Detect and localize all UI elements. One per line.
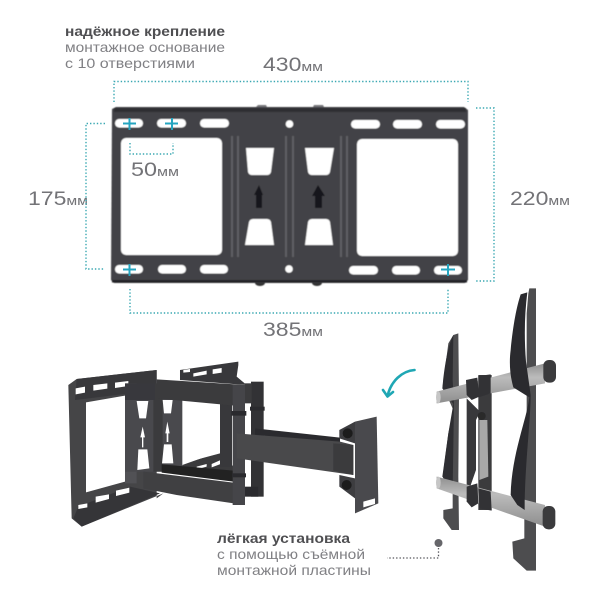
heading: reliable mounting: с 10 отверстиями xyxy=(65,55,195,71)
frame slots xyxy=(76,381,129,509)
left rail back xyxy=(443,333,459,530)
rear vertical post xyxy=(220,403,232,467)
swing arm mount perspective view xyxy=(68,362,378,527)
frame rail shading xyxy=(75,370,157,400)
mounting plate front view xyxy=(111,105,468,286)
dimension: height 220 mm xyxy=(476,108,570,281)
dimension: hole spacing 50 mm: 50 мм xyxy=(131,160,179,181)
ribs xyxy=(231,136,348,257)
upper and lower slots xyxy=(115,119,465,274)
cyan rotation arrow xyxy=(383,370,414,396)
large windows xyxy=(121,138,222,255)
front tube xyxy=(233,385,245,505)
dimension: height 175 mm xyxy=(28,124,105,269)
outer arm xyxy=(255,428,340,443)
center clamps xyxy=(466,374,492,511)
heading: reliable mounting: надёжное крепление xyxy=(65,23,225,39)
caption: easy installation: с помощью съёмной xyxy=(217,546,365,562)
lower arm xyxy=(143,472,245,505)
dimension: height 175 mm: 175 мм xyxy=(28,189,88,210)
right rail front xyxy=(510,292,531,510)
caption: easy installation: лёгкая установка xyxy=(217,530,350,546)
right window of rear plate is the gap xyxy=(183,402,220,463)
center plate xyxy=(478,375,492,510)
rear lower frame xyxy=(182,452,233,478)
upper arm xyxy=(157,379,245,407)
dimension: width 385 mm xyxy=(130,289,448,341)
caption: easy installation: монтажной пластины xyxy=(217,562,371,578)
wall bracket xyxy=(339,422,355,443)
rear upper frame xyxy=(180,362,247,385)
heading: reliable mounting: монтажное основание xyxy=(65,39,225,55)
left rail front xyxy=(442,335,454,488)
dimension: hole spacing 50 mm xyxy=(130,143,179,181)
center plate xyxy=(125,395,182,472)
outer frame with window xyxy=(68,370,163,527)
caption: easy installation xyxy=(217,530,371,578)
dimension: width 430 mm xyxy=(114,55,468,102)
right rail back xyxy=(512,288,536,571)
dimension: width 430 mm: 430 мм xyxy=(263,55,323,76)
heading: reliable mounting xyxy=(65,23,225,71)
direction arrows xyxy=(254,185,325,208)
cyan hole markers xyxy=(123,118,455,276)
bar end caps xyxy=(543,360,556,383)
dimension: width 385 mm: 385 мм xyxy=(263,320,323,341)
callout leader with dot xyxy=(387,539,442,558)
lower bar xyxy=(437,477,545,527)
side view of removable plate xyxy=(436,288,556,571)
rear tube xyxy=(251,382,264,497)
keyhole openings xyxy=(245,148,334,245)
upper bar xyxy=(437,363,545,403)
dimension: height 220 mm: 220 мм xyxy=(510,189,570,210)
